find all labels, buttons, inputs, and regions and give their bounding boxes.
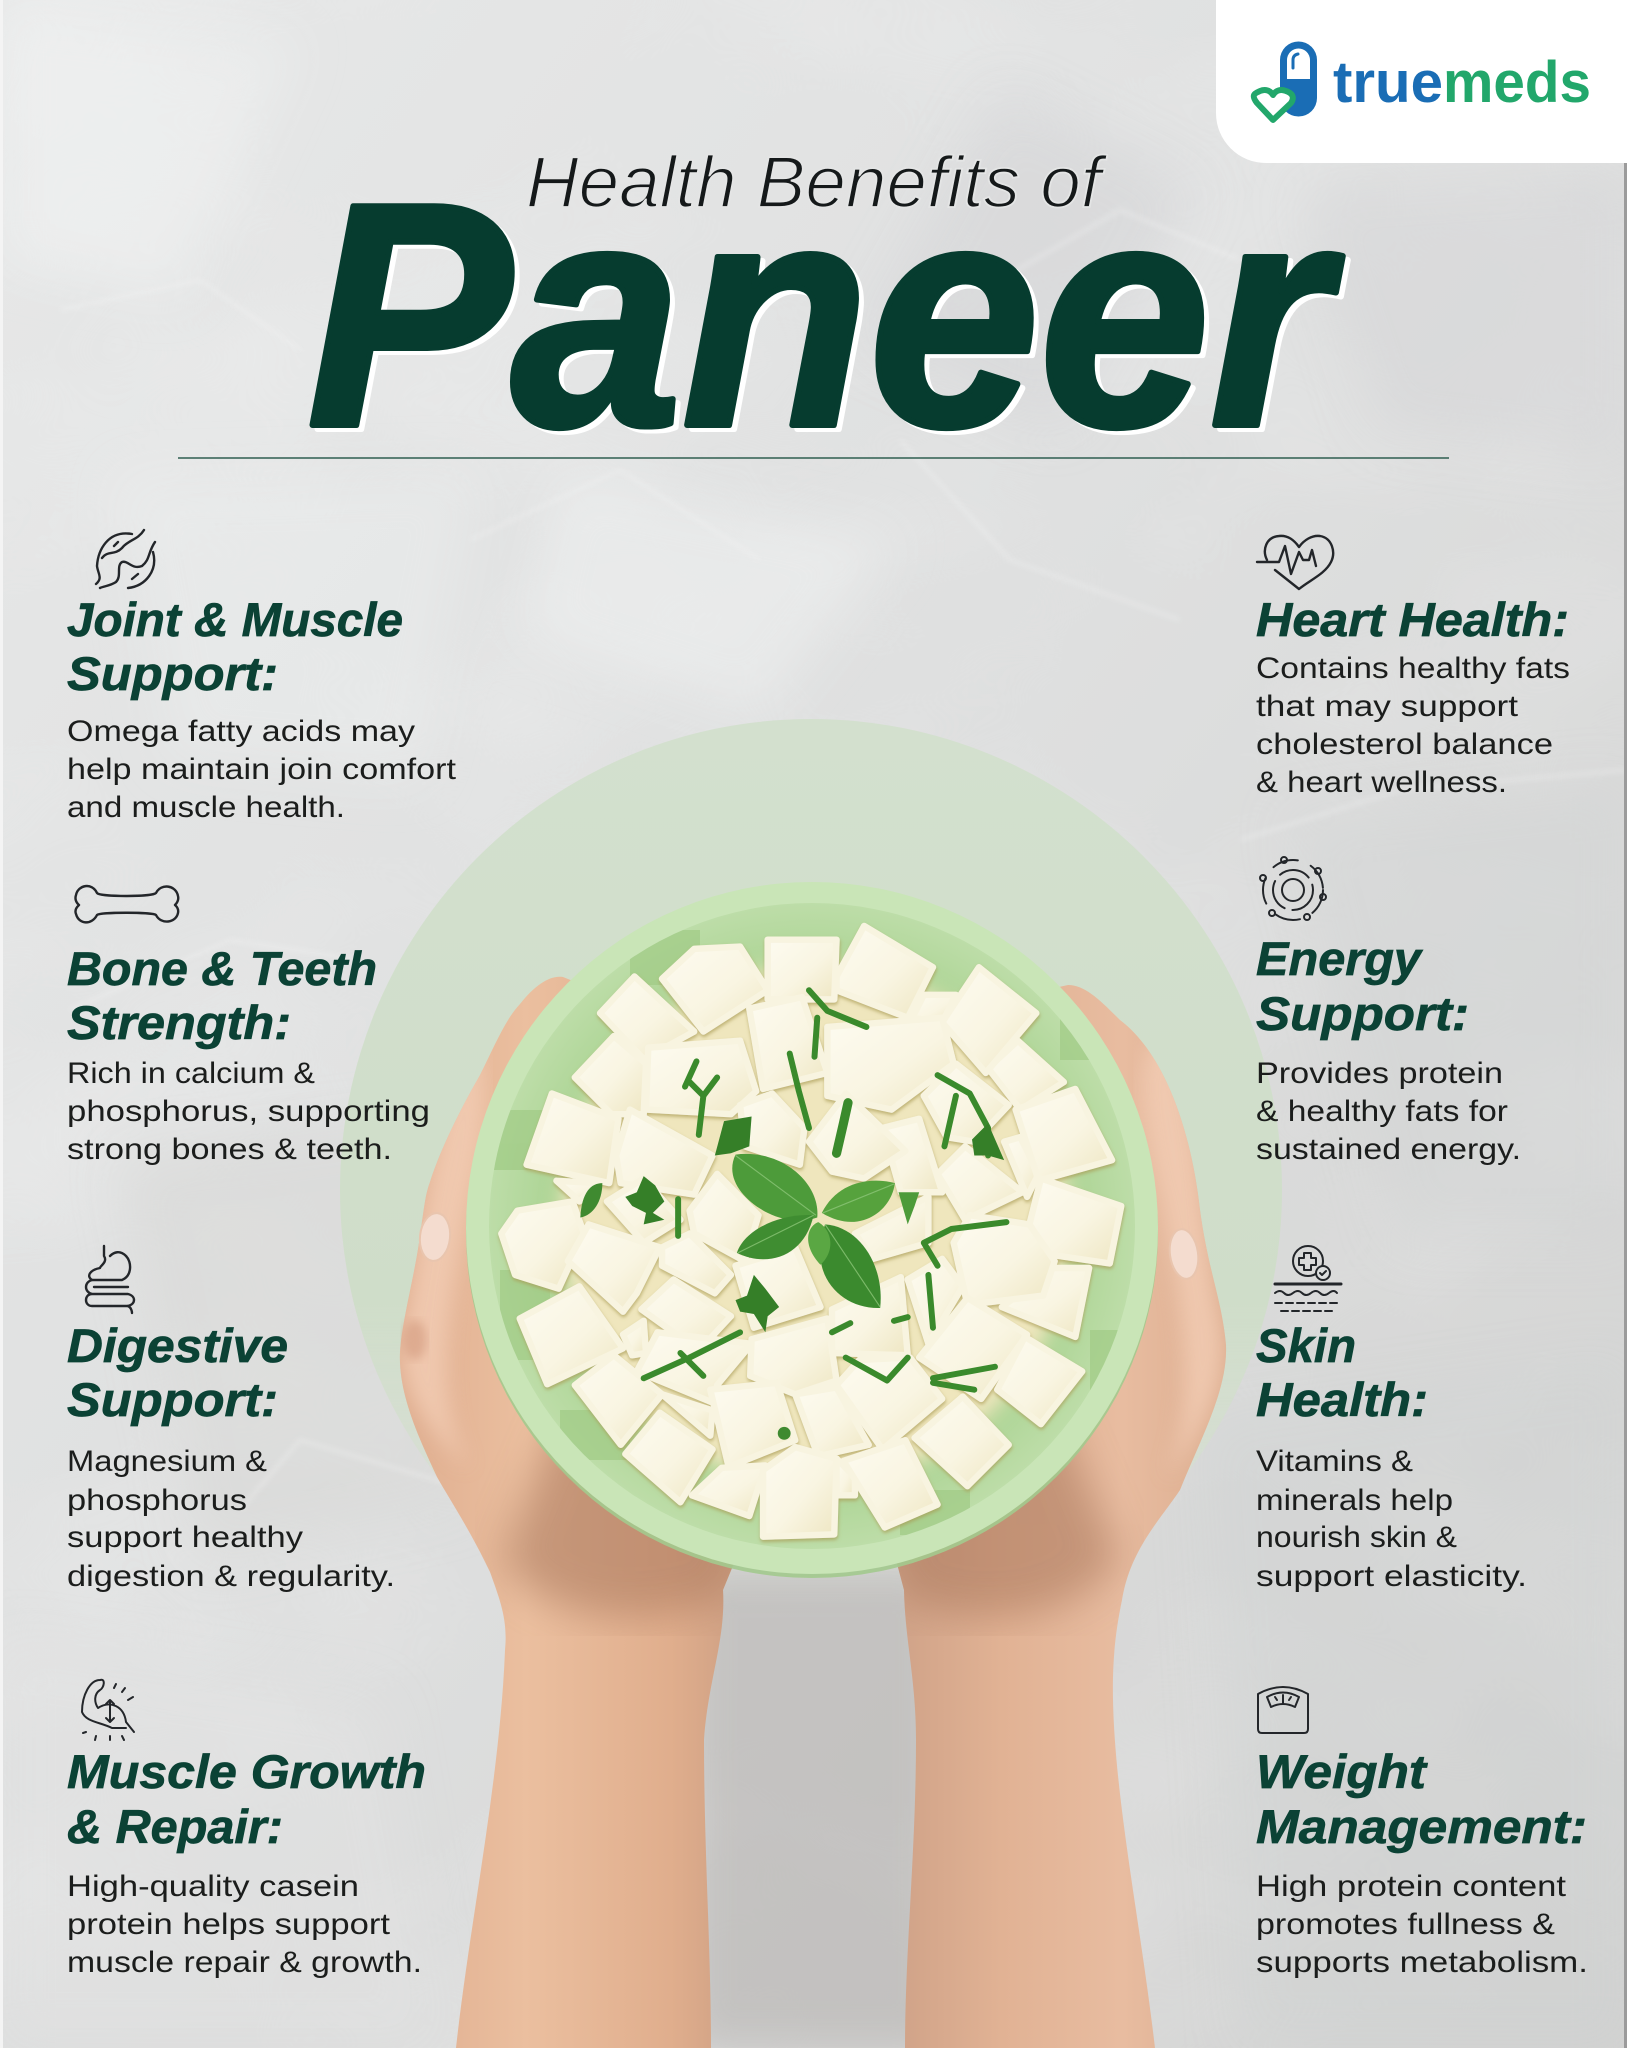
text: High-quality casein: [67, 1870, 359, 1903]
text: support elasticity.: [1256, 1560, 1527, 1593]
text: [1256, 1870, 1588, 1979]
text: [67, 1057, 430, 1166]
heading: Health:: [1256, 1373, 1428, 1426]
text: [67, 1870, 422, 1979]
heading: Energy: [1256, 932, 1424, 985]
text: promotes fullness &: [1256, 1908, 1555, 1941]
text: High protein content: [1256, 1870, 1567, 1903]
icon: energy molecule: [1260, 857, 1326, 920]
right thumb nail: [1167, 1227, 1201, 1281]
logo wordmark: [1333, 50, 1591, 115]
panel: Bone & Teeth Strength: [67, 886, 430, 1166]
left hand and arm: [400, 977, 760, 2048]
green circle behind bowl: [340, 719, 1282, 1661]
icon: stomach and intestines: [86, 1246, 134, 1313]
text: muscle repair & growth.: [67, 1946, 422, 1979]
heading: Support:: [1256, 987, 1469, 1040]
text: minerals help: [1256, 1484, 1453, 1517]
text: that may support: [1256, 690, 1519, 723]
bowl: [466, 882, 1158, 1578]
heading: [67, 1319, 288, 1426]
text: cholesterol balance: [1256, 728, 1553, 761]
heading: & Repair:: [67, 1800, 283, 1853]
icon: weighing scale: [1258, 1687, 1308, 1733]
icon: bone: [75, 886, 178, 922]
text: Provides protein: [1256, 1057, 1503, 1090]
title: Health Benefits of: Health Benefits of: [526, 143, 1108, 223]
panel: Digestive Support: [67, 1246, 395, 1593]
heading: [1256, 1745, 1587, 1853]
heading: Bone & Teeth: [67, 942, 377, 995]
text: Contains healthy fats: [1256, 652, 1570, 685]
herbs: mint and parsley: [580, 990, 1006, 1440]
text: & healthy fats for: [1256, 1095, 1508, 1128]
heading: [1256, 1319, 1428, 1426]
panel: Energy Support: [1256, 857, 1521, 1166]
text: Omega fatty acids may: [67, 715, 415, 748]
panel: Skin Health: [1256, 1246, 1527, 1593]
text: [1256, 652, 1570, 799]
paneer cubes: [501, 926, 1121, 1537]
heading: Muscle Growth: [67, 1745, 426, 1798]
text: help maintain join comfort: [67, 753, 457, 786]
heading: [1256, 932, 1469, 1040]
icon: skin layers with cross: [1275, 1246, 1341, 1311]
text: strong bones & teeth.: [67, 1133, 392, 1166]
text: supports metabolism.: [1256, 1946, 1588, 1979]
logo panel: truemeds: [1216, 0, 1627, 163]
text: sustained energy.: [1256, 1133, 1521, 1166]
panel: Joint & Muscle Support: [67, 530, 457, 824]
icon: heart with pulse: [1257, 536, 1333, 589]
text: & heart wellness.: [1256, 766, 1507, 799]
text: and muscle health.: [67, 791, 345, 824]
text: Vitamins &: [1256, 1445, 1413, 1478]
heading: Joint & Muscle: [67, 593, 403, 646]
logo wordmark: true: [1333, 50, 1443, 115]
text: digestion & regularity.: [67, 1560, 395, 1593]
shadow between the arms: [690, 1570, 940, 2048]
title: Paneer: Paneer: [312, 142, 1349, 497]
heading: Skin: [1256, 1319, 1356, 1372]
heading: Heart Health:: [1256, 593, 1569, 646]
text: [67, 715, 457, 824]
heading: Support:: [67, 647, 278, 700]
text: support healthy: [67, 1521, 303, 1554]
text: [1256, 1445, 1527, 1593]
text: phosphorus, supporting: [67, 1095, 430, 1128]
text: phosphorus: [67, 1484, 247, 1517]
heading: Management:: [1256, 1800, 1587, 1853]
logo wordmark: meds: [1443, 50, 1591, 115]
text: protein helps support: [67, 1908, 391, 1941]
left thumb nail: [418, 1212, 452, 1262]
right hand and arm: [880, 985, 1226, 2048]
panel: Heart Health: [1256, 536, 1570, 799]
icon: joint: [96, 530, 155, 588]
text: Magnesium &: [67, 1445, 267, 1478]
text: nourish skin &: [1256, 1521, 1457, 1554]
text: Rich in calcium &: [67, 1057, 315, 1090]
heading: Strength:: [67, 996, 291, 1049]
title: Paneer: Paneer: [307, 138, 1344, 493]
heading: Digestive: [67, 1319, 288, 1372]
heading: Weight: [1256, 1745, 1429, 1798]
text: [67, 1445, 395, 1593]
heading: [67, 593, 403, 700]
heading: Support:: [67, 1373, 278, 1426]
heading: [67, 942, 377, 1049]
icon: flexed arm: [82, 1680, 134, 1740]
heading: [67, 1745, 426, 1853]
panel: Muscle Growth & Repair: [67, 1680, 426, 1979]
photo: hands holding bowl of paneer: [400, 882, 1226, 2048]
panel: Weight Management: [1256, 1687, 1588, 1979]
text: [1256, 1057, 1521, 1166]
icon: capsule and heart: [1254, 42, 1317, 120]
